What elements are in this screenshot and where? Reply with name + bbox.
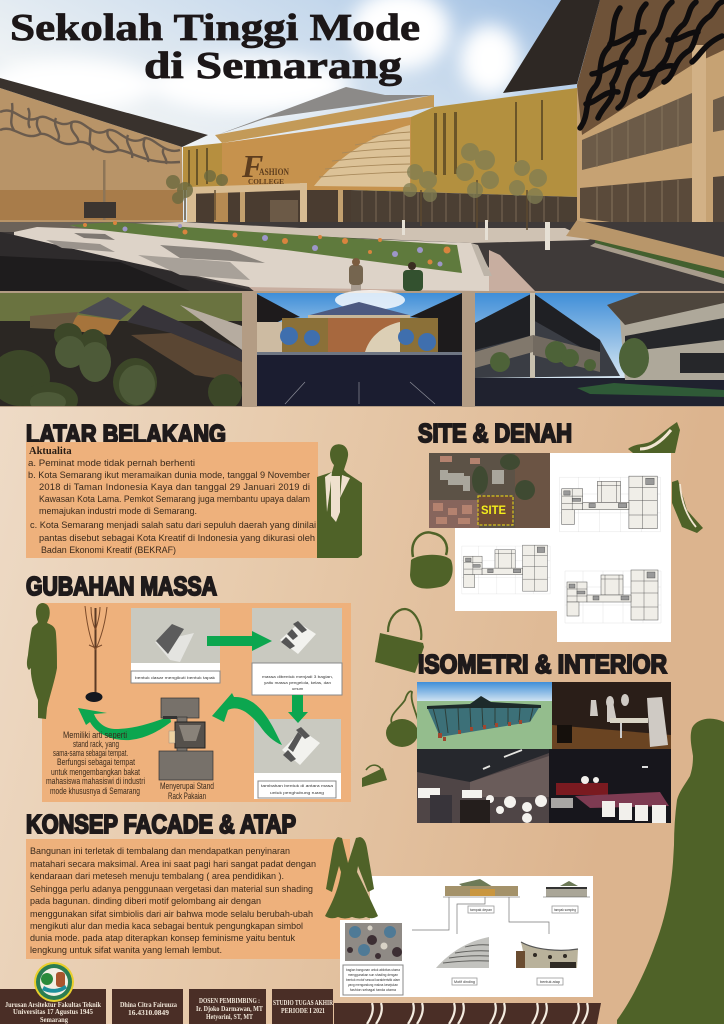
step 2 <box>252 608 342 695</box>
side elevation: tampak samping <box>554 907 576 912</box>
footer: department: Jurusan Arsitektur Fakultas Teknik <box>5 1002 101 1009</box>
step 1 <box>131 608 220 683</box>
plan form: stand rack plan <box>159 698 213 780</box>
step 2: umum <box>292 686 304 691</box>
footer: supervisors <box>196 998 263 1021</box>
panel: Konsep Facade text: dunia mode. pada atap diterapkan konsep feminisme yaitu bentuk <box>30 932 295 943</box>
icon: handbag 1 <box>410 532 453 589</box>
central wing and main hall <box>183 87 577 230</box>
wave motif: Motif dinding <box>454 979 475 984</box>
icon: high heel shoe 2 <box>672 480 703 533</box>
panel: Aktualita: pantas disebut sebagai Kota Kreatif di Indonesia yang dikurasi oleh <box>39 532 315 543</box>
icon: handbag 4 <box>362 765 387 787</box>
trees <box>166 143 547 230</box>
title <box>10 7 420 87</box>
footer stripes <box>367 1003 588 1024</box>
sign: Fashion College: F <box>241 148 263 184</box>
footer: studio: STUDIO TUGAS AKHIR <box>273 1000 333 1007</box>
panel: facade drawings <box>340 876 593 997</box>
step 3: untuk penghubung ruang <box>270 790 324 795</box>
wave motif <box>436 937 489 985</box>
step 2: massa dibentuk menjadi 3 bagian, <box>262 674 333 679</box>
isometric model <box>417 682 552 749</box>
footer: student <box>120 1002 178 1017</box>
facade note: bentuk motof sesuai karakteristik alam <box>346 977 401 982</box>
icon: man silhouette <box>317 444 362 558</box>
left building <box>0 78 208 222</box>
panel: Konsep Facade text: Bangunan ini terletak di tembalang dan mendapatkan penyinaran <box>30 845 290 856</box>
front elevation: tampak depan <box>470 907 492 912</box>
step 2: yaitu massa pengelola, kelas, dan <box>264 680 331 685</box>
text: stand rack meaning: mahasiswa mahasiswi di industri <box>46 775 145 786</box>
footer: supervisors: DOSEN PEMBIMBING : <box>199 998 260 1005</box>
floor plan 2 <box>460 542 552 598</box>
footer: student: 16.4310.0849 <box>128 1010 170 1017</box>
panel: Aktualita: memajukan industri mode di Semarang. <box>39 505 197 516</box>
ground and planter <box>0 220 724 291</box>
title: Sekolah Tinggi Mode <box>10 7 420 49</box>
interior: make-up room <box>417 749 549 823</box>
panel: Konsep Facade text: kendaraan dari meteseh menuju tembalang ( area pendidikan ). <box>30 870 284 881</box>
icon: woman silhouette <box>27 603 57 719</box>
floor plan 1 <box>558 473 662 536</box>
panel: site and floor plans <box>429 453 671 642</box>
text: plan caption <box>160 780 214 801</box>
facade note: yang mengandung makna kesejukan <box>348 982 398 987</box>
panel: Konsep Facade text: mengikuti alur dan media kaca sebagai bentuk pengungkapan simbol <box>30 920 303 931</box>
text: stand rack meaning: Berfungsi sebagai tempat <box>57 756 135 767</box>
footer band <box>0 989 601 1024</box>
heading: Latar Belakang: LATAR BELAKANG <box>26 419 226 449</box>
sign: Fashion College: COLLEGE <box>248 177 284 186</box>
thumbnail: front view <box>257 290 462 406</box>
facade note: fashion sebagai tanda utama <box>350 987 397 992</box>
facade pattern swatch <box>345 923 402 961</box>
interior: runway hall <box>549 749 671 823</box>
interior: studio with mannequins <box>552 682 671 749</box>
footer: department: Universitas 17 Agustus 1945 <box>13 1009 94 1016</box>
panel: Aktualita: Kawasan Kota Lama. Pemkot Semarang juga membantu upaya dalam <box>39 493 310 504</box>
front elevation <box>443 879 520 912</box>
arrow: curved to stand rack <box>78 708 171 740</box>
arrow: step 2 to 3 <box>288 695 308 723</box>
icon: high heel shoe 1 <box>628 422 680 453</box>
heading: Site & Denah: SITE & DENAH <box>418 418 572 448</box>
footer: supervisors: Hetyorini, ST, MT <box>206 1014 253 1021</box>
panel: Aktualita: 2018 di Taman Indonesia Kaya dan tanggal 29 Januari 2019 di <box>39 481 310 492</box>
footer: department: Semarang <box>40 1017 69 1024</box>
text: stand rack meaning: stand rack, yang <box>73 738 119 749</box>
title: di Semarang <box>144 45 402 87</box>
facade note: menggunakan sun shading dengan <box>348 972 398 977</box>
facade note <box>343 965 403 995</box>
panel: Konsep Facade text <box>26 839 350 959</box>
panel: hero render <box>0 0 724 291</box>
text: plan caption: Rack Pakaian <box>168 790 206 801</box>
thumbnail: perspective view <box>475 293 724 406</box>
panel: Gubahan Massa <box>42 603 351 802</box>
people <box>349 220 550 291</box>
logo <box>34 962 74 1002</box>
step 1: bentuk dasar mengikuti bentuk tapak <box>135 675 215 680</box>
side elevation <box>543 881 590 912</box>
footer: supervisors: Ir. Djoko Darmawan, MT <box>196 1006 263 1013</box>
panel: Konsep Facade text: lengkung untuk sifat wanita yang lemah lembut. <box>30 944 222 955</box>
callout lines <box>412 897 549 934</box>
text: plan caption: Menyerupai Stand <box>160 780 214 791</box>
text: stand rack meaning: untuk mengembangkan bakat <box>51 766 140 777</box>
footer: studio: PERIODE I 2021 <box>281 1008 326 1015</box>
icon: handbag 2 <box>375 609 424 673</box>
heading: Konsep Facade & Atap: KONSEP FACADE & ATAP <box>26 809 296 839</box>
panel: Konsep Facade text: matahari secara maksimal. Area ini saat pagi hari sangat padat dengan <box>30 858 316 869</box>
arrow: curved to plan <box>212 693 282 745</box>
panel: Konsep Facade text: Sehingga perlu adanya penggunaan vergetasi dan material sun shading <box>30 883 313 894</box>
panel: Aktualita: a. Peminat mode tidak pernah berhenti <box>28 457 195 468</box>
roof form: bentuk atap <box>540 979 561 984</box>
arrow: step 1 to 2 <box>207 631 272 651</box>
panel: thumbnail row <box>0 290 724 418</box>
text: stand rack meaning: mode khususnya di Semarang <box>50 785 140 796</box>
sign: Fashion College <box>241 148 289 186</box>
icon: large woman silhouette <box>617 719 724 1024</box>
facade note: bagian bangunan untuk aktivitas utama <box>346 967 401 972</box>
text: stand rack meaning <box>46 729 145 796</box>
site map <box>429 453 550 528</box>
thumbnail: aerial view <box>0 293 242 418</box>
panel: Konsep Facade text: pada bagunan. dinding diberi motif gelombang air dengan <box>30 895 261 906</box>
site map: SITE <box>481 503 506 517</box>
heading: Isometri & Interior: ISOMETRI & INTERIOR <box>418 649 667 679</box>
step 3: tambahan bentuk di antara masa <box>261 783 334 788</box>
panel: Aktualita: Badan Ekonomi Kreatif (BEKRAF) <box>41 544 176 555</box>
icon: dress silhouette <box>325 837 378 918</box>
panel: Konsep Facade text: menggunakan sifat simbiolis dari air bahwa mode selalu berubah-ubah <box>30 908 313 919</box>
heading: Gubahan Massa: GUBAHAN MASSA <box>26 571 217 601</box>
footer: studio <box>273 1000 333 1015</box>
panel: Aktualita <box>26 442 318 558</box>
roof form <box>516 942 578 985</box>
text: stand rack meaning: Memiliki arti seperti <box>63 729 127 740</box>
panel: isometric and interior images <box>417 682 671 823</box>
step 3 <box>254 719 341 799</box>
panel: Aktualita: Aktualita <box>29 446 72 457</box>
footer: student: Dhina Citra Fairuuza <box>120 1002 178 1009</box>
floor plan 3 <box>563 567 663 627</box>
footer: department <box>5 1002 101 1024</box>
sign: Fashion College: ASHION <box>259 168 289 178</box>
panel: Aktualita: b. Kota Semarang ikut meramaikan dunia mode, tanggal 9 November <box>28 469 310 480</box>
right building <box>503 0 724 257</box>
text: stand rack meaning: sama-sama sebagai tempat. <box>53 747 128 758</box>
icon: handbag 3 <box>386 691 418 747</box>
panel: Aktualita: c. Kota Semarang menjadi salah satu dari sepuluh daerah yang dinilai <box>30 519 316 530</box>
icon: stand rack <box>85 606 107 702</box>
